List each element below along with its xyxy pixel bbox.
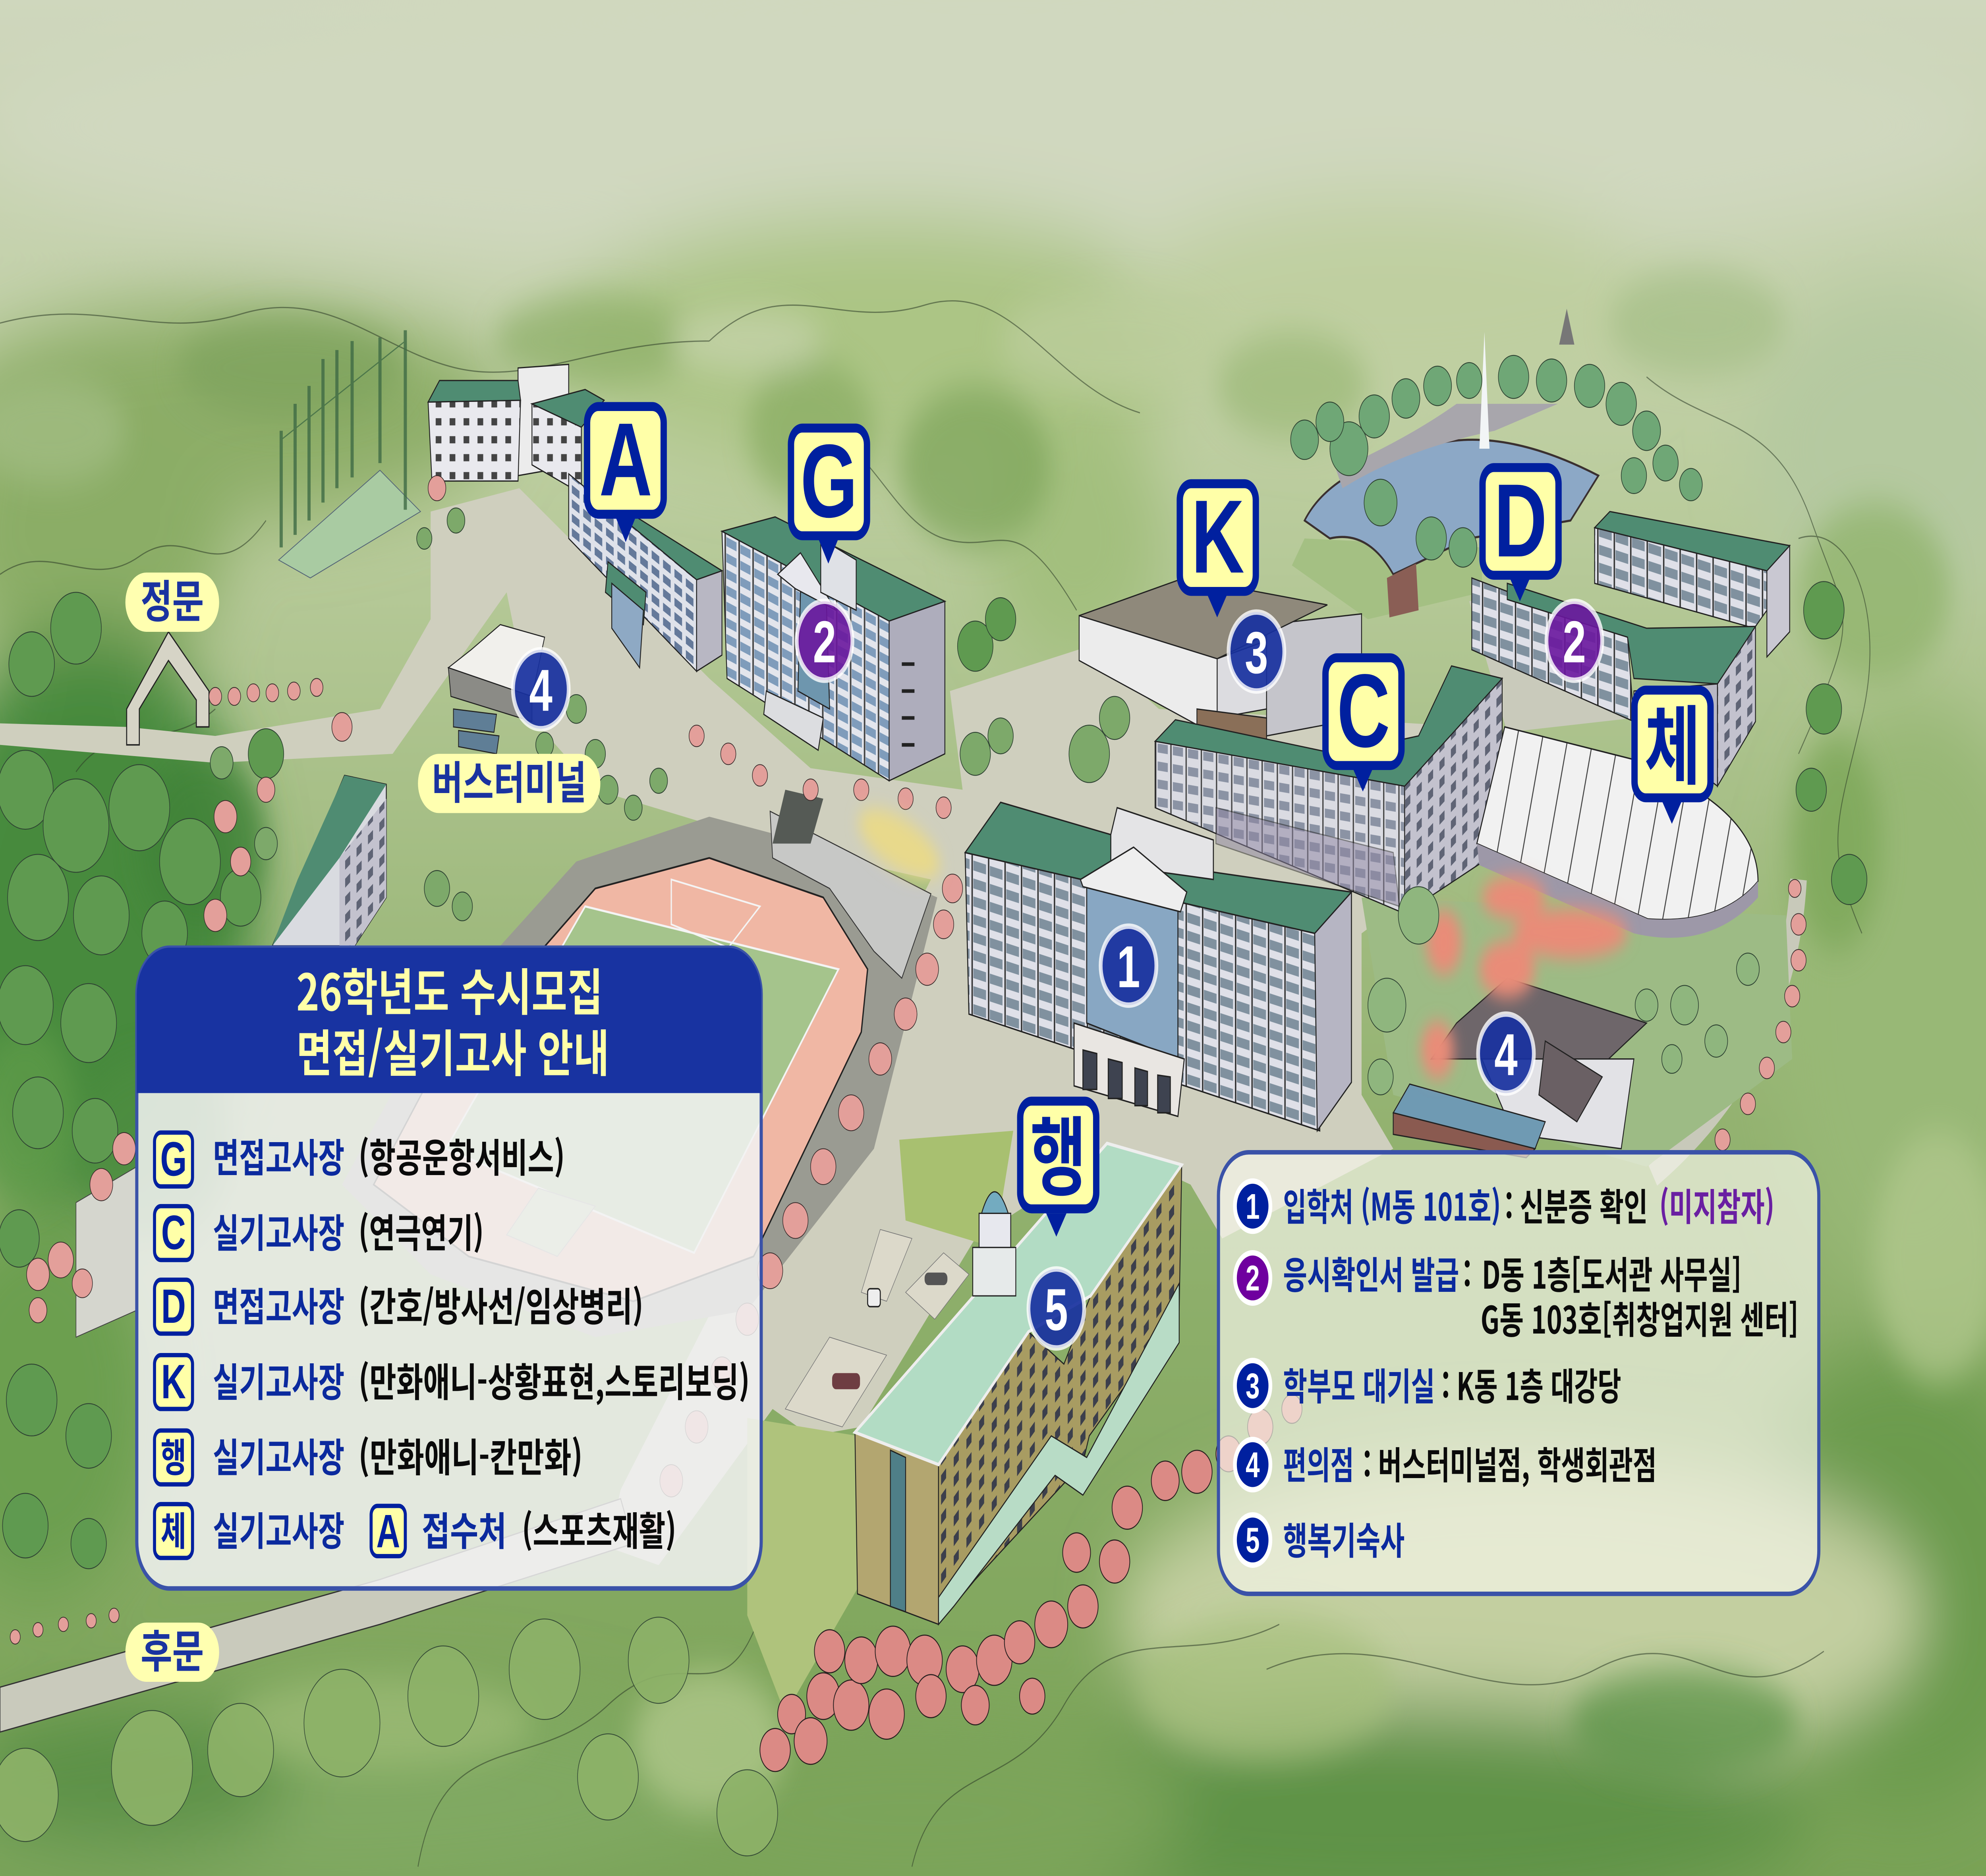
item 3: :: [1441, 1357, 1450, 1411]
row 행: (만화애니-칸만화): [358, 1426, 583, 1483]
item 1: 1: [1246, 1186, 1260, 1227]
dormitory building: [855, 1143, 1182, 1624]
student union building: [1393, 978, 1646, 1158]
item 1: 입학처 (M동 101호): [1283, 1177, 1501, 1231]
pin G: [791, 423, 867, 564]
row 체 and A: 실기고사장: [213, 1500, 344, 1557]
label: 정문: 정문: [141, 566, 204, 631]
row 체 and A: 체: [161, 1500, 186, 1557]
row G: 면접고사장: [213, 1126, 344, 1183]
item 2: D동 1층[도서관 사무실]: [1482, 1245, 1742, 1300]
row 행: 실기고사장: [213, 1426, 344, 1483]
marker 2 G: [797, 601, 852, 680]
slope trees: [210, 508, 1130, 921]
item 4: 편의점: [1283, 1435, 1354, 1490]
pin 행: 행: [1030, 1089, 1086, 1214]
union trees: [1368, 887, 1759, 1095]
marker 2 D: [1546, 601, 1602, 680]
item 3: [1235, 1357, 1621, 1411]
building C: [1155, 666, 1502, 914]
row D: D: [161, 1279, 186, 1334]
item 4: :: [1363, 1435, 1372, 1490]
pin 체: 체: [1644, 677, 1700, 803]
parking bays and cars: [785, 1229, 969, 1427]
building D: [1472, 578, 1756, 786]
item 1: 신분증 확인: [1520, 1177, 1648, 1231]
label: 버스터미널: 버스터미널: [432, 747, 586, 812]
pin D: D: [1494, 463, 1547, 579]
item 2: :: [1463, 1245, 1472, 1300]
pin K: [1180, 479, 1256, 618]
item 3: 학부모 대기실: [1283, 1357, 1435, 1411]
row G: G: [160, 1132, 187, 1186]
campus ground and roads: [0, 470, 1799, 1732]
row K: (만화애니-상황표현,스토리보딩): [358, 1351, 750, 1408]
pin G: G: [800, 423, 858, 539]
pin 행: [1020, 1089, 1096, 1237]
item 5: 5: [1246, 1520, 1260, 1560]
item 3: K동 1층 대강당: [1457, 1357, 1621, 1411]
row K: [155, 1351, 750, 1409]
marker 5: [1028, 1269, 1084, 1348]
bus terminal and buses: [448, 625, 545, 754]
row 행: [155, 1426, 583, 1484]
pin D: [1482, 463, 1559, 601]
label: 후문: [126, 1616, 219, 1682]
marker 3: [1229, 612, 1284, 691]
azalea cluster below dormitory: [760, 1395, 1302, 1772]
forest trees: [0, 581, 1867, 1569]
marker 2 G: 2: [813, 609, 836, 675]
item 3: 3: [1246, 1366, 1260, 1406]
upper-left white buildings: [428, 365, 604, 494]
building A: [569, 474, 722, 671]
yellow ginkgo trees: [852, 794, 947, 893]
item 1: [1235, 1177, 1774, 1231]
marker 5: 5: [1045, 1277, 1068, 1343]
item 4: [1235, 1435, 1657, 1490]
item 1: (미지참자): [1659, 1177, 1774, 1231]
item 2: G동 103호[취창업지원 센터]: [1481, 1290, 1799, 1345]
item 2: [1235, 1245, 1799, 1345]
row D: 면접고사장: [213, 1275, 344, 1332]
item 2: 2: [1246, 1258, 1260, 1298]
marker 4 bus terminal: [513, 650, 569, 729]
lower tree canopy: [0, 1617, 778, 1856]
main gate: [127, 632, 209, 745]
panel header: [137, 948, 761, 1093]
marker 1: [1101, 926, 1156, 1005]
pink cherry trees: [10, 476, 1806, 1644]
title: 면접/실기고사 안내: [296, 1013, 609, 1086]
pin K: K: [1191, 479, 1244, 595]
left slope building: [272, 776, 386, 946]
salmon foliage near union: [1421, 876, 1628, 1079]
marker 4 bus terminal: 4: [529, 658, 553, 724]
item 5: 행복기숙사: [1283, 1511, 1404, 1565]
panel: facilities legend: [1219, 1152, 1819, 1594]
ink hill contours: [0, 301, 1870, 1866]
row D: [155, 1275, 643, 1334]
row K: K: [161, 1355, 186, 1409]
marker 2 D: 2: [1563, 609, 1586, 675]
building G: [722, 517, 945, 781]
numbered map markers: [513, 601, 1602, 1348]
label: 정문: [126, 566, 219, 632]
stadium and running track: [342, 790, 937, 1337]
back building D: [1595, 511, 1790, 657]
item 4: 4: [1246, 1445, 1260, 1485]
title: 26학년도 수시모집: [296, 952, 603, 1025]
row 행: 행: [161, 1426, 186, 1483]
garden trees: [1291, 355, 1702, 567]
golf range nets: [281, 330, 405, 548]
pin 체: [1634, 677, 1710, 824]
row C: [155, 1202, 484, 1260]
map pins group: [587, 402, 1710, 1237]
panel: exam rooms: [137, 948, 761, 1588]
building M: [965, 802, 1351, 1131]
row C: C: [161, 1206, 186, 1260]
label: 후문: 후문: [141, 1616, 204, 1681]
marker 1: 1: [1117, 934, 1140, 1000]
row 체 and A: 접수처: [422, 1500, 507, 1557]
row C: 실기고사장: [213, 1202, 344, 1259]
pin C: [1325, 653, 1401, 791]
building K: [1079, 578, 1362, 745]
row 체 and A: A: [376, 1505, 400, 1557]
item 4: 버스터미널점, 학생회관점: [1378, 1435, 1657, 1490]
pond and garden: [1304, 309, 1598, 618]
title: [296, 952, 609, 1086]
pin A: [587, 402, 664, 542]
row G: (항공운항서비스): [358, 1126, 565, 1183]
row G: [155, 1126, 565, 1187]
marker 4 student union: [1478, 1014, 1534, 1093]
row K: 실기고사장: [213, 1351, 344, 1408]
left bleachers: [76, 1167, 137, 1337]
marker 4 student union: 4: [1494, 1022, 1518, 1088]
pin A: A: [599, 402, 652, 518]
row 체 and A: [155, 1500, 676, 1558]
marker 3: 3: [1245, 620, 1268, 686]
pin C: C: [1337, 653, 1390, 769]
row C: (연극연기): [358, 1202, 484, 1259]
row D: (간호/방사선/임상병리): [358, 1275, 643, 1332]
row 체 and A: (스포츠재활): [522, 1500, 676, 1557]
gymnasium dome: [1477, 727, 1758, 938]
item 1: :: [1505, 1177, 1513, 1231]
item 2: 응시확인서 발급: [1283, 1245, 1459, 1300]
